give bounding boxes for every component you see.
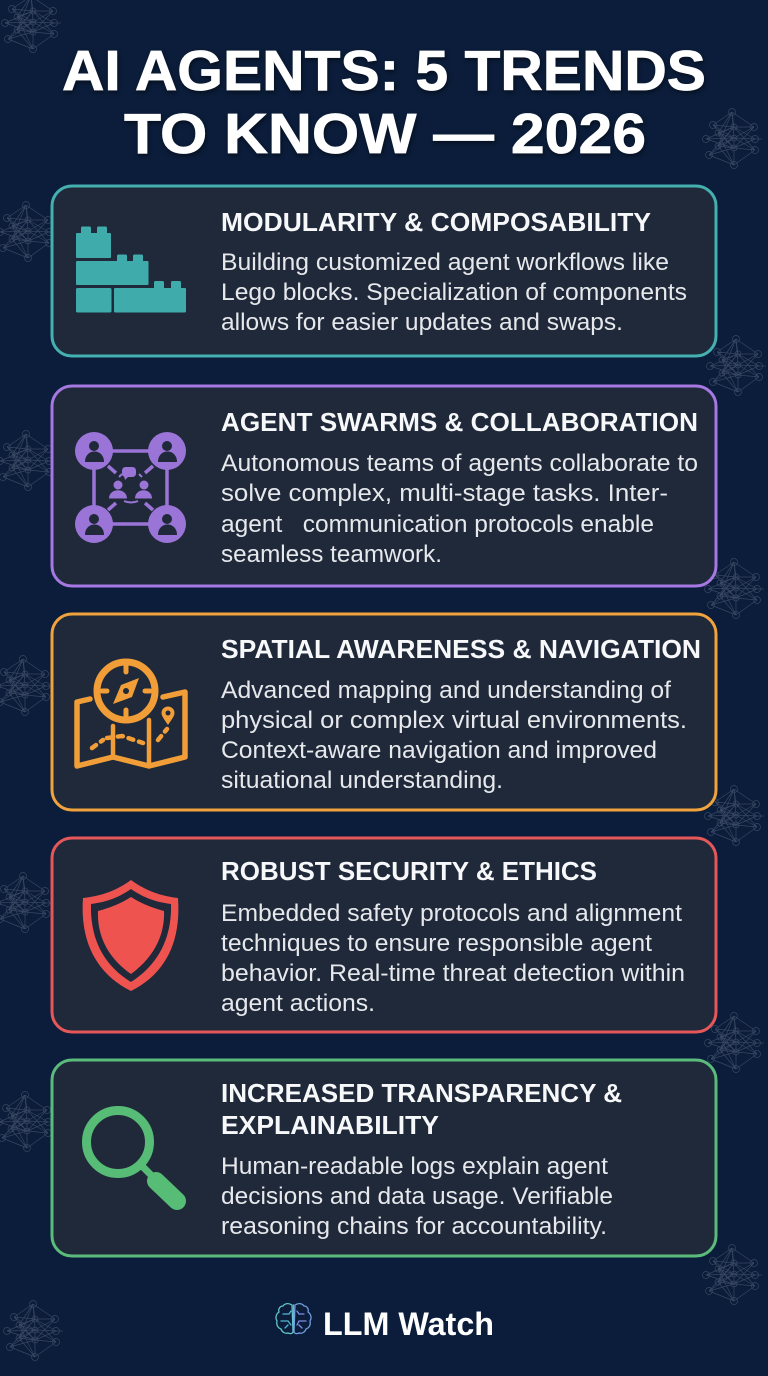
heading: transparency — [221, 1078, 622, 1140]
footer logo: LLM Watch — [276, 1304, 494, 1342]
body: modularity: allows for easier updates and swaps. — [221, 309, 623, 336]
body: modularity: Lego blocks. Specialization of components — [221, 279, 687, 306]
heading: modularity: MODULARITY & COMPOSABILITY — [221, 207, 651, 237]
panel: spatial awareness and navigation — [52, 614, 716, 810]
title: AI AGENTS: 5 TRENDS — [62, 39, 706, 103]
body: security — [221, 900, 685, 1017]
icon: building blocks — [76, 226, 186, 312]
body: swarms: seamless teamwork. — [221, 541, 442, 568]
heading: swarms: AGENT SWARMS & COLLABORATION — [221, 407, 698, 437]
panel: modularity and composability — [52, 186, 716, 356]
body: spatial: Advanced mapping and understanding of — [221, 677, 671, 704]
icon: agent network — [75, 432, 186, 543]
body: transparency — [221, 1153, 613, 1240]
heading: spatial: SPATIAL AWARENESS & NAVIGATION — [221, 634, 701, 664]
body: swarms: Autonomous teams of agents collaborate to — [221, 450, 698, 477]
heading: security: ROBUST SECURITY & ETHICS — [221, 856, 597, 886]
panel: agent swarms and collaboration — [52, 386, 716, 586]
body: transparency: decisions and data usage. Verifiable — [221, 1183, 613, 1210]
body: modularity — [221, 249, 687, 336]
icon: brain — [276, 1304, 311, 1334]
panel: robust security and ethics — [52, 838, 716, 1032]
body: security: agent actions. — [221, 990, 375, 1017]
body: swarms: agent communication protocols enable — [221, 511, 654, 538]
body: swarms — [221, 450, 698, 568]
icon: shield — [83, 880, 178, 991]
heading: transparency: EXPLAINABILITY — [221, 1110, 439, 1140]
body: security: behavior. Real-time threat detection within — [221, 960, 685, 987]
body: security: techniques to ensure responsible agent — [221, 930, 652, 957]
body: spatial — [221, 677, 687, 794]
body: spatial: situational understanding. — [221, 767, 503, 794]
body: spatial: physical or complex virtual environments. — [221, 707, 687, 734]
heading: transparency: INCREASED TRANSPARENCY & — [221, 1078, 622, 1108]
title — [62, 39, 706, 166]
body: spatial: Context-aware navigation and improved — [221, 737, 657, 764]
body: swarms: solve complex, multi-stage tasks. Inter- — [221, 480, 668, 507]
body: security: Embedded safety protocols and alignment — [221, 900, 682, 927]
body: modularity: Building customized agent workflows like — [221, 249, 669, 276]
title: TO KNOW — 2026 — [124, 102, 646, 166]
wordmark: LLM Watch — [323, 1306, 494, 1342]
body: transparency: reasoning chains for accountability. — [221, 1213, 607, 1240]
body: transparency: Human-readable logs explain agent — [221, 1153, 608, 1180]
icon: magnifying glass — [86, 1110, 177, 1201]
panel: increased transparency and explainability — [52, 1060, 716, 1256]
icon: compass and map — [77, 662, 185, 766]
